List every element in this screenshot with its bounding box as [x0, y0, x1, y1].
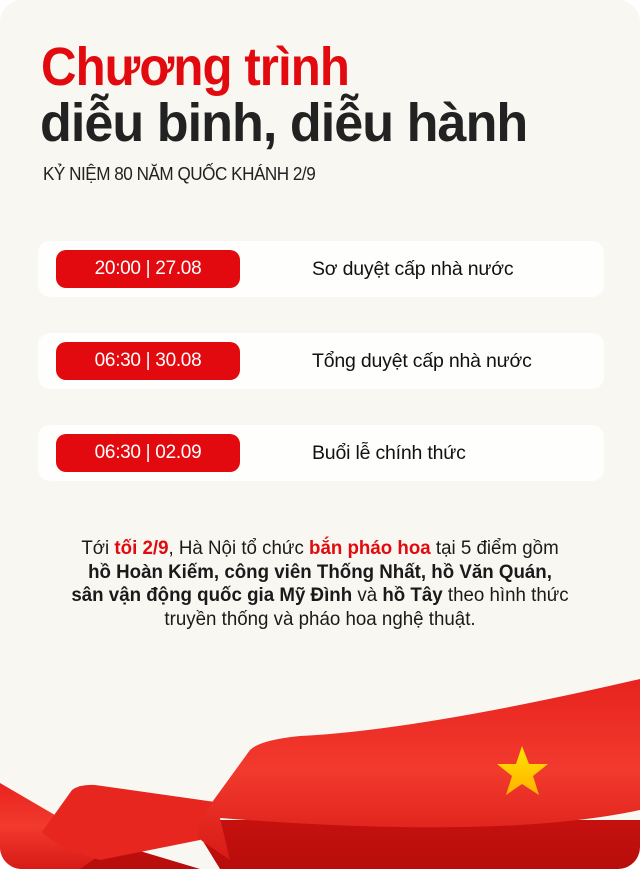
- fireworks paragraph: hồ Hoàn Kiếm, công viên Thống Nhất, hồ Văn Quán,: [88, 560, 552, 582]
- lower dark band: [0, 810, 640, 869]
- time pill 3: [56, 434, 240, 472]
- flag ribbon: [0, 679, 640, 869]
- fireworks paragraph: truyền thống và pháo hoa nghệ thuật.: [164, 608, 476, 630]
- time pill 1: 20:00 | 27.08: [95, 258, 201, 279]
- schedule row 3: [38, 425, 604, 481]
- title line 2: diễu binh, diễu hành: [40, 93, 527, 153]
- icon: star: [497, 746, 548, 795]
- label 2: Tổng duyệt cấp nhà nước: [312, 350, 532, 372]
- title line 1: Chương trình: [41, 37, 349, 97]
- left ribbon tail: [0, 783, 100, 869]
- label 1: Sơ duyệt cấp nhà nước: [312, 258, 513, 280]
- schedule row 1: [38, 241, 604, 297]
- time pill 2: 06:30 | 30.08: [95, 350, 201, 371]
- left fold: [42, 785, 215, 860]
- label 3: Buổi lễ chính thức: [312, 442, 466, 464]
- fireworks paragraph: [71, 536, 569, 630]
- time pill 1: [56, 250, 240, 288]
- schedule row 2: [38, 333, 604, 389]
- fireworks paragraph: Tới tối 2/9, Hà Nội tổ chức bắn pháo hoa tại 5 điểm gồm: [81, 537, 559, 559]
- fireworks paragraph: sân vận động quốc gia Mỹ Đình và hồ Tây theo hình thức: [71, 584, 569, 606]
- subtitle: KỶ NIỆM 80 NĂM QUỐC KHÁNH 2/9: [43, 164, 315, 184]
- time pill 3: 06:30 | 02.09: [95, 442, 201, 463]
- main band: [197, 679, 640, 860]
- time pill 2: [56, 342, 240, 380]
